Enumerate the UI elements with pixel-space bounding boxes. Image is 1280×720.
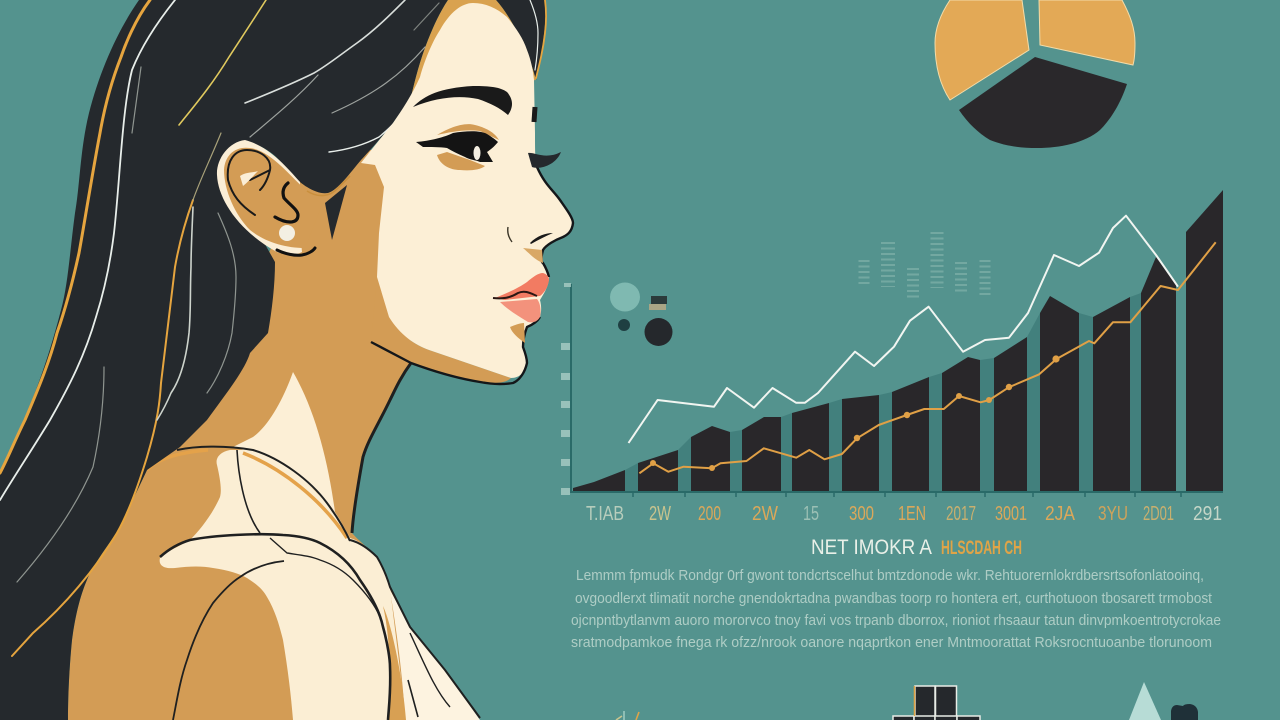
x axis labels: 300 [849, 503, 874, 525]
x axis labels: T.IAB [586, 503, 624, 525]
neck shadow wedge [325, 185, 347, 240]
large dark dot [644, 318, 672, 346]
chart heading [811, 536, 1022, 559]
x axis labels: 3001 [995, 503, 1027, 525]
y axis tick marks [561, 283, 571, 495]
lip line [493, 292, 537, 298]
small dark dot [618, 319, 630, 331]
far eyelashes [528, 152, 561, 168]
decorative circles and legend [610, 282, 672, 346]
x axis labels: 2JA [1045, 503, 1076, 525]
hair strands [0, 0, 546, 656]
ear [217, 140, 350, 255]
x axis labels: 200 [698, 503, 721, 525]
body text paragraph: Lemmm fpmudk Rondgr 0rf gwont tondcrtscelhut bmtzdonode wkr. Rehtuorernlokrdbersrtsofonlatooinq, [576, 567, 1204, 584]
x axis labels: 2D01 [1143, 503, 1174, 525]
eyebrow [413, 86, 512, 115]
gold line markers [650, 355, 1060, 471]
skin: neck and shoulders [68, 150, 420, 720]
pie slice left [935, 0, 1029, 100]
icon: pale triangle [1129, 682, 1161, 720]
x axis labels [586, 503, 1222, 525]
lower lip [500, 299, 541, 322]
x axis labels: 291 [1193, 503, 1222, 525]
dark bars [573, 190, 1223, 492]
hair behind forehead [496, 0, 546, 80]
x axis tick marks [633, 492, 1181, 497]
garment highlight [160, 450, 405, 720]
forehead tan band [411, 0, 536, 97]
under-lip shadow [510, 323, 525, 343]
gold edge [914, 686, 916, 716]
x axis labels: 2W [649, 503, 671, 525]
ear highlight [240, 171, 258, 186]
legend chip [649, 296, 667, 310]
white trend line [628, 216, 1178, 443]
nostril [530, 233, 553, 244]
nose crease [508, 227, 512, 242]
ear rim [217, 140, 302, 255]
illustration: woman in profile [0, 0, 573, 720]
eye highlight [474, 146, 480, 160]
body text paragraph: ovgoodlerxt tlimatit norche gnendokrtadna pwandbas toorp ro hontera ert, curthotuoon tbosarett trmobost [575, 590, 1213, 607]
jaw shadow [371, 277, 511, 383]
ear lines [228, 150, 270, 215]
y axis [571, 284, 1223, 492]
chart heading: HLSCDAH CH [941, 538, 1022, 559]
upper blocks [915, 686, 956, 718]
dress strip right [390, 590, 480, 720]
faint data columns [864, 232, 985, 298]
x axis labels: 1EN [898, 503, 926, 525]
pie slice dark [959, 57, 1127, 148]
light circle [610, 282, 640, 312]
body text paragraph [571, 567, 1221, 651]
pie chart [935, 0, 1135, 148]
face [361, 3, 573, 378]
lower blocks [893, 716, 980, 720]
upper lip [495, 273, 549, 300]
neck highlight [233, 372, 335, 512]
gold trend line [639, 242, 1216, 473]
x axis labels: 3YU [1098, 503, 1128, 525]
face details [371, 86, 573, 384]
chart: bars and trend lines [561, 190, 1223, 525]
pie slice right [1039, 0, 1135, 65]
garment seam lines [160, 363, 480, 720]
under-eye shadow [437, 152, 485, 170]
x axis labels: 2017 [946, 503, 976, 525]
x axis labels: 2W [752, 503, 778, 525]
icon: dark pillars [1171, 704, 1198, 720]
profile outline [371, 167, 573, 384]
eyelid [437, 124, 499, 140]
ear fold [275, 183, 298, 222]
body text paragraph: sratmodpamkoe fnega rk ofzz/nrook oanore nqaprtkon ener Mntmoorattat Roksrocntuoanbe tlorunoom [571, 634, 1212, 651]
hair [0, 0, 448, 720]
x axis labels: 15 [803, 503, 819, 525]
icon: building blocks [893, 686, 980, 720]
ear interior [224, 148, 322, 248]
icon: grass tuft [616, 711, 639, 720]
body text paragraph: ojcnpntbytlanvm auoro mororvco tnoy favi vos trpanb dborrox, rioniot rhsaaur tatun dinvpmkoentrotycrokae [571, 612, 1221, 629]
nose shadow [523, 248, 543, 263]
far brow sliver [534, 107, 535, 122]
chart heading: NET IMOKR A [811, 536, 932, 559]
hair edge glow [307, 176, 350, 196]
eye [416, 131, 498, 162]
dress gold strip [383, 606, 406, 720]
earring [279, 225, 295, 241]
shoulder gold trim [147, 450, 347, 538]
earlobe outline [277, 248, 315, 255]
shaded stripes between bars [625, 293, 1141, 492]
